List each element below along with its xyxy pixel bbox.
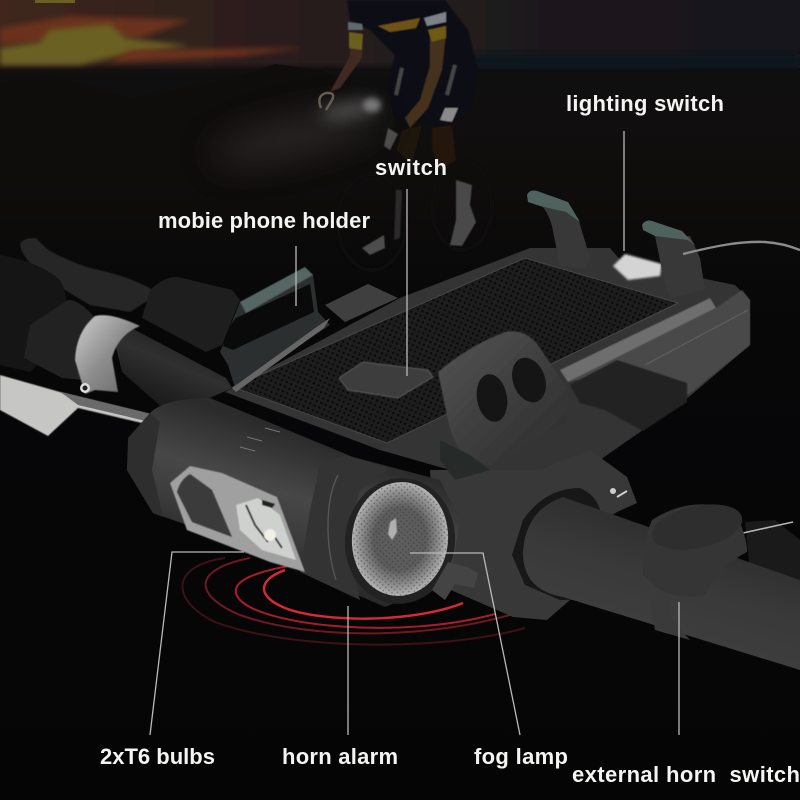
socks and shoes xyxy=(450,180,476,246)
shorts stripes xyxy=(396,65,455,95)
line: horn alarm xyxy=(347,606,349,735)
bar clamp xyxy=(430,450,637,620)
plate top left panel xyxy=(325,284,398,322)
white bracket xyxy=(0,375,150,436)
yellow band xyxy=(378,18,420,32)
right side hardware behind bar xyxy=(743,520,800,600)
rear right arm xyxy=(642,221,705,298)
silver ring xyxy=(75,315,140,394)
label: mobile phone holder: mobie phone holder xyxy=(158,208,370,233)
grip pad right xyxy=(506,353,552,407)
handlebar clamp block xyxy=(24,300,95,380)
leader lines xyxy=(150,131,679,735)
plate side panel xyxy=(568,290,750,395)
line: lighting switch xyxy=(623,131,625,251)
front grip clamp xyxy=(438,331,570,480)
plate base xyxy=(225,248,750,480)
line: 2xT6 bulbs xyxy=(150,552,244,735)
silver bulb window xyxy=(170,466,305,572)
grip pad left xyxy=(473,372,511,424)
fog lamp rim xyxy=(339,473,461,609)
dashes on body xyxy=(240,428,280,451)
switch button xyxy=(339,362,433,398)
phone holder plate xyxy=(225,191,750,480)
line: fog lamp xyxy=(410,553,520,735)
label: switch: switch xyxy=(375,155,447,180)
rear wheel xyxy=(432,160,492,250)
back phone holder box xyxy=(142,277,240,352)
line: switch xyxy=(406,189,408,376)
body ring left xyxy=(127,413,163,517)
sunset sky xyxy=(0,0,800,68)
cyclist in background xyxy=(330,0,492,270)
brake lever xyxy=(20,238,155,312)
headlight beam xyxy=(209,93,381,172)
label: lighting switch: lighting switch xyxy=(566,91,724,116)
cylinder xyxy=(127,398,460,607)
right arm xyxy=(405,34,446,128)
main bulb xyxy=(236,498,296,560)
label: 2xT6 bulbs: 2xT6 bulbs xyxy=(100,744,215,769)
handlebar grip left xyxy=(0,255,67,372)
left arm xyxy=(330,34,362,92)
side tab under plate xyxy=(570,360,687,431)
line: mobile phone holder xyxy=(295,246,297,306)
front wheel xyxy=(338,174,406,270)
front rail xyxy=(560,298,716,382)
red horn sound waves xyxy=(182,556,525,645)
handlebar right xyxy=(523,497,800,670)
lighting switch button xyxy=(613,254,662,280)
handlebar tube left xyxy=(112,328,232,410)
label: horn alarm: horn alarm xyxy=(282,744,398,769)
line: external horn switch xyxy=(678,602,680,735)
fog lamp side tab xyxy=(432,562,478,600)
mobile phone holder arm xyxy=(220,267,330,392)
dark hills xyxy=(0,64,370,176)
body ring right xyxy=(300,455,390,600)
label: fog lamp: fog lamp xyxy=(474,744,568,769)
fog lamp lens xyxy=(346,477,454,601)
external horn switch xyxy=(643,497,747,640)
rear left arm xyxy=(527,191,590,268)
legs xyxy=(432,125,456,170)
charging cable xyxy=(683,242,800,254)
rubber mesh pad xyxy=(233,258,678,443)
left reflector xyxy=(177,474,232,537)
label: external horn switch: external horn switch xyxy=(572,762,800,787)
torso and shorts xyxy=(347,0,478,125)
flashlight body xyxy=(127,398,461,609)
